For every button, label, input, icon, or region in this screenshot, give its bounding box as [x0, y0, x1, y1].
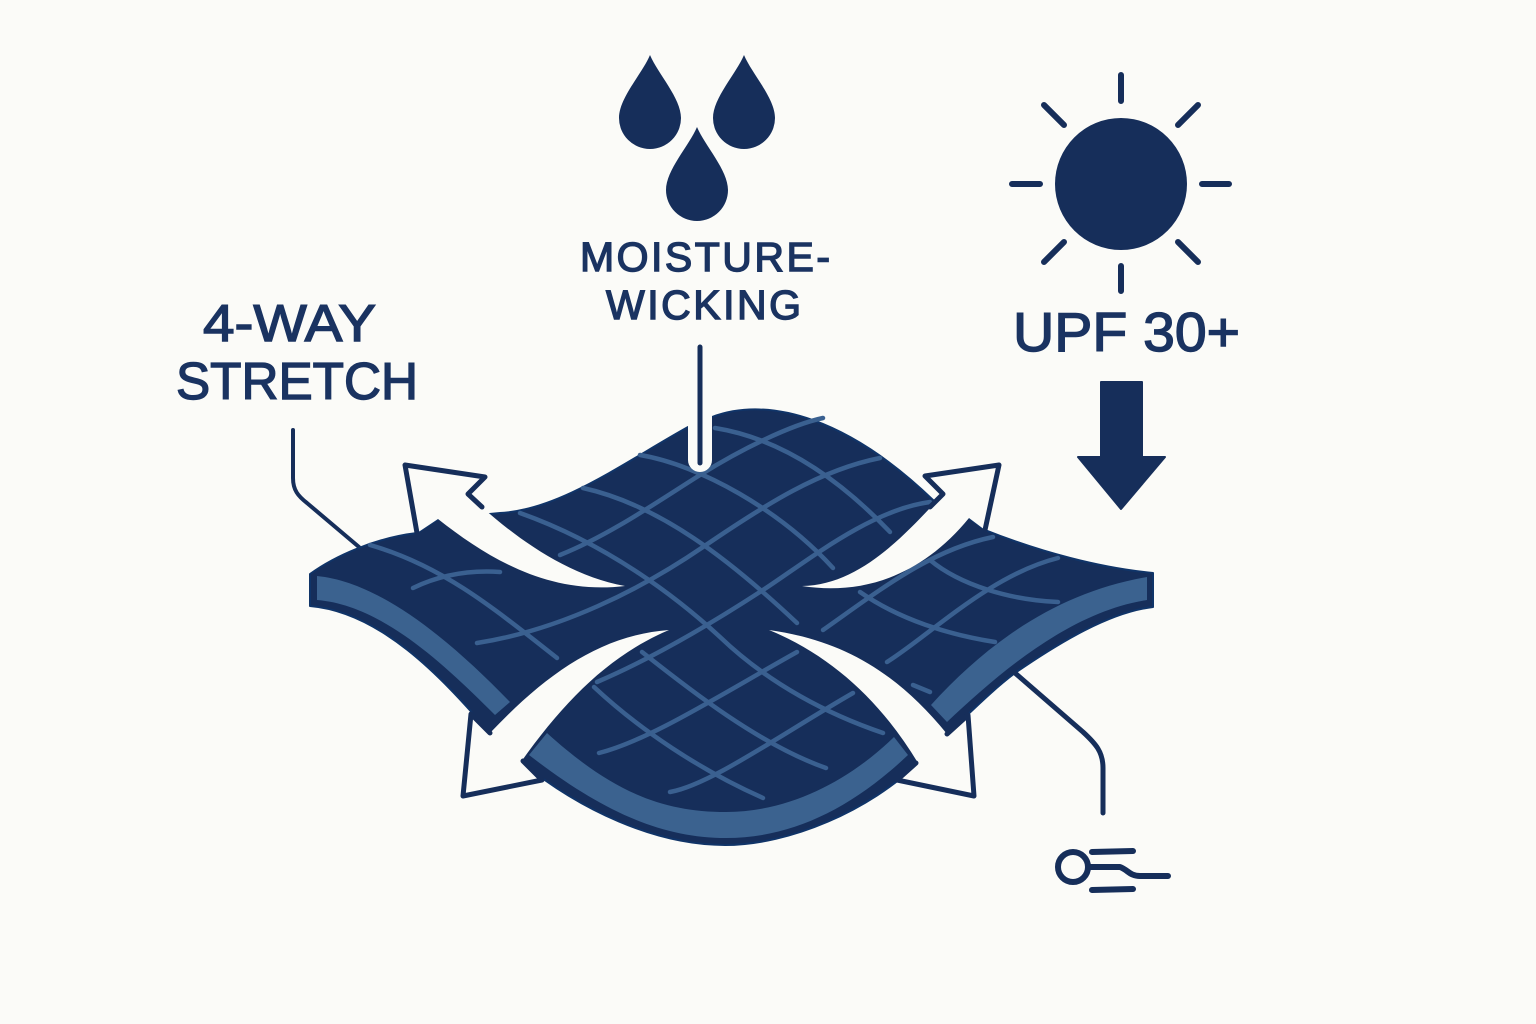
fabric silhouette	[310, 409, 1153, 845]
fabric weave grid lines	[370, 418, 1058, 798]
label: moisture-wicking: WICKING	[606, 282, 801, 328]
arrow: stretch up-right	[802, 463, 1000, 588]
arrow: stretch down-right	[769, 630, 974, 797]
label: 4-way stretch: STRETCH	[176, 353, 418, 411]
arrow: UV pointing down	[1078, 382, 1165, 509]
label: moisture-wicking	[580, 234, 830, 328]
label: 4-way stretch: 4-WAY	[203, 295, 376, 353]
icon: three water drops	[619, 55, 775, 221]
leader line: fabric to breathability icon	[1015, 673, 1103, 813]
icon: airflow symbol	[1058, 851, 1168, 890]
label: 4-way stretch	[176, 295, 418, 411]
label: UPF 30+: UPF 30+	[1013, 301, 1240, 363]
leader line: moisture-wicking to fabric	[688, 347, 712, 472]
arrow: stretch down-left	[463, 630, 669, 797]
leader line: stretch to fabric	[293, 430, 359, 547]
label: moisture-wicking: MOISTURE-	[580, 234, 830, 280]
fabric edge thickness bands	[317, 576, 1147, 838]
fabric swatch	[310, 409, 1153, 845]
arrow: stretch up-left	[405, 465, 625, 587]
icon: sun	[1012, 75, 1229, 291]
